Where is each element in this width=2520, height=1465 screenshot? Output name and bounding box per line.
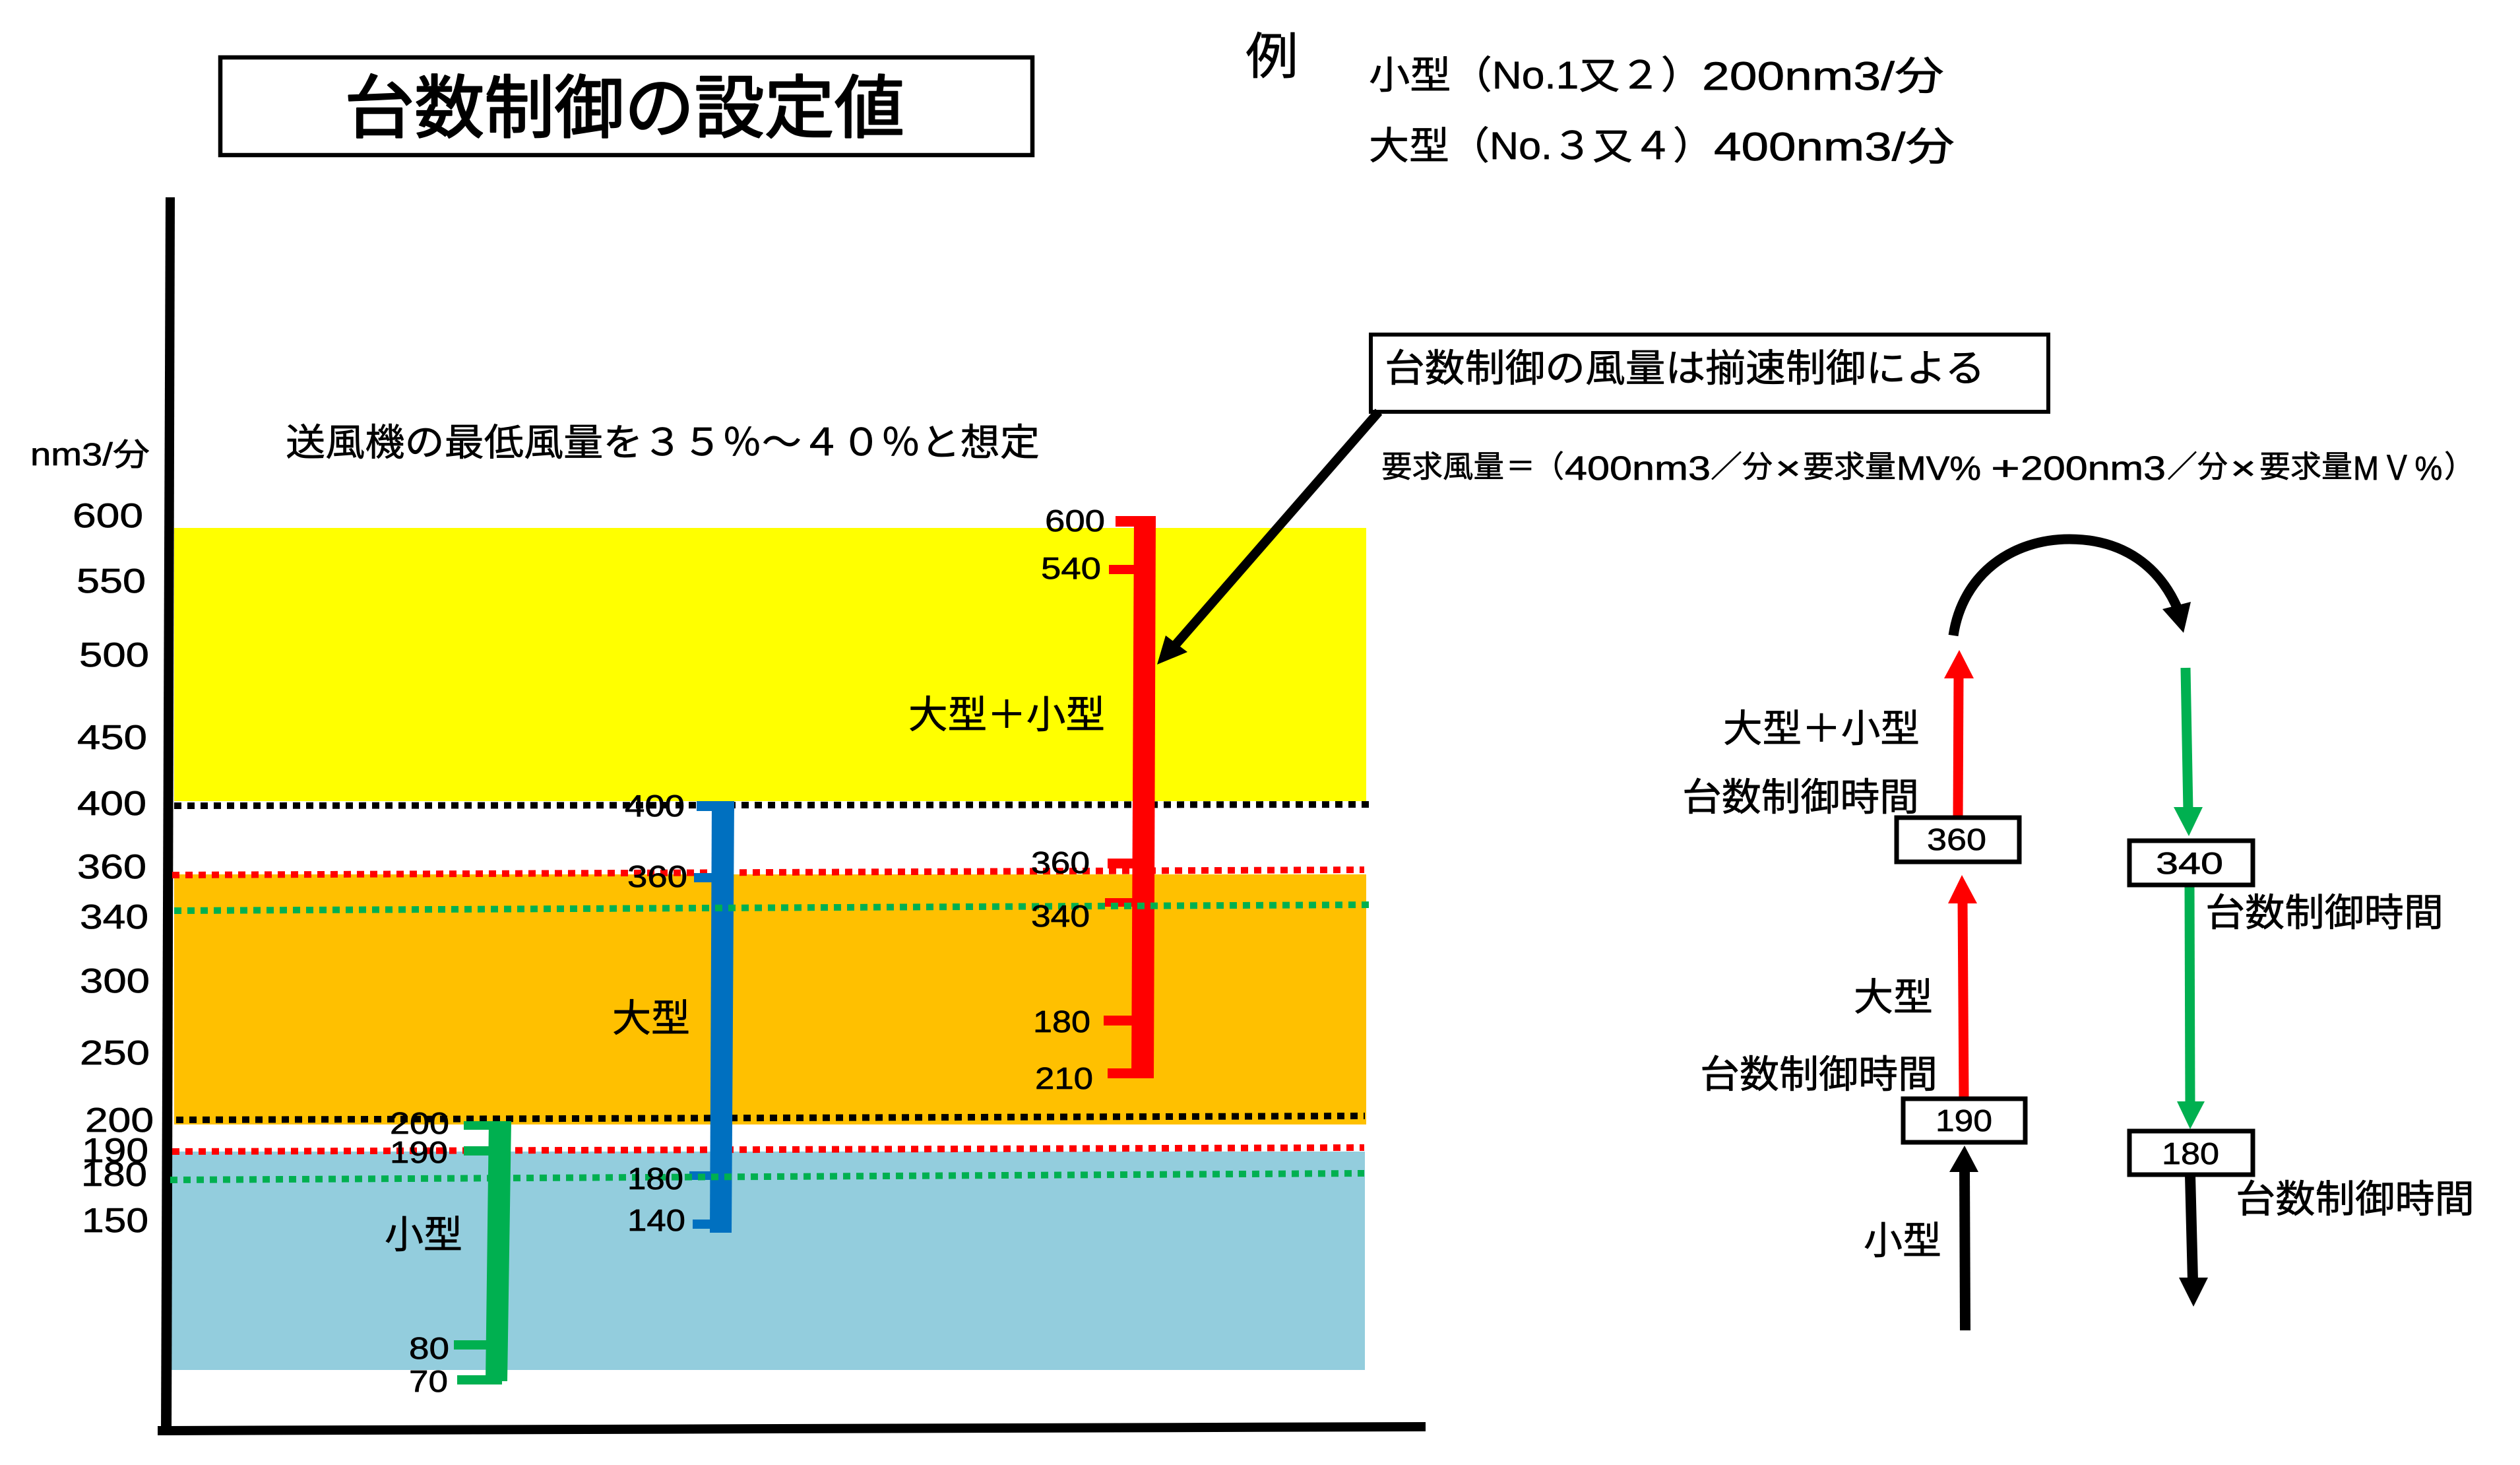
labels: small bracket <box>390 1106 449 1398</box>
dotted line: 190 <box>172 1148 1364 1152</box>
example heading: 例 <box>1245 29 1298 85</box>
formula: ＝ <box>1506 449 1535 484</box>
band: large fan range <box>174 874 1366 1124</box>
labels: large bracket: 360 <box>627 859 687 894</box>
arrow: curved transition <box>1953 539 2191 635</box>
formula: × <box>1775 449 1801 487</box>
chart note: 送風機の最低風量を３５％～４０％と想定 <box>286 422 1040 464</box>
formula: ／ <box>1711 449 1742 484</box>
box: 340 <box>2129 841 2253 885</box>
label: control time upper left: 台数制御時間 <box>1682 776 1919 819</box>
arrow: large fan rising <box>1948 875 1977 1098</box>
formula: 400nm3 <box>1565 449 1711 487</box>
y axis tick labels: 180 <box>81 1156 147 1194</box>
y axis tick labels: 190 <box>82 1132 148 1170</box>
bracket: large range <box>689 801 734 1233</box>
label: large flow: 大型 <box>1854 976 1933 1019</box>
arrow: large plus small rising <box>1944 650 1974 817</box>
formula: 200nm3 <box>2021 449 2166 487</box>
y axis unit: nm3/分 <box>30 438 150 472</box>
labels: small bracket: 70 <box>409 1364 448 1398</box>
labels: large plus small bracket: 600 <box>1045 504 1105 538</box>
labels: large bracket: 140 <box>627 1203 685 1237</box>
formula: ／ <box>2167 449 2197 484</box>
labels: large plus small bracket <box>1031 504 1105 1095</box>
arrow: large plus small falling <box>2174 668 2203 836</box>
y axis tick labels: 250 <box>80 1034 150 1072</box>
dotted line: 200 <box>176 1116 1365 1120</box>
labels: large plus small bracket: 340 <box>1031 899 1090 933</box>
formula: （ <box>1534 449 1564 484</box>
formula <box>1381 449 2474 487</box>
formula: 分 <box>1742 449 1773 484</box>
label: small: 小型 <box>385 1214 462 1256</box>
arrow: callout to red bracket <box>1157 412 1379 665</box>
bracket: small range <box>454 1121 511 1384</box>
dotted line: 400 <box>174 804 1369 806</box>
labels: large plus small bracket: 210 <box>1035 1061 1093 1095</box>
labels: large bracket: 180 <box>627 1161 683 1196</box>
example: small fan capacity: 小型（No.1又２） <box>1369 54 1702 97</box>
example: large fan capacity <box>1369 125 1955 169</box>
labels: large plus small bracket: 360 <box>1031 845 1090 880</box>
box: 180: 180 <box>2162 1136 2219 1171</box>
label: control time lower right: 台数制御時間 <box>2236 1178 2474 1221</box>
formula: MＶ% <box>2353 449 2445 487</box>
y axis tick labels: 340 <box>80 898 148 936</box>
y axis tick labels <box>73 497 154 1240</box>
bracket: large plus small range <box>1104 516 1156 1078</box>
dotted line: 180 <box>170 1173 1364 1180</box>
band: small fan range <box>170 1152 1365 1370</box>
formula: + <box>1991 449 2020 487</box>
y axis <box>161 197 175 1435</box>
arrow: small fan rising <box>1949 1146 1978 1330</box>
box: 180 <box>2129 1131 2253 1175</box>
example: small fan capacity <box>1369 54 1944 98</box>
y axis tick labels: 400 <box>77 785 146 823</box>
y axis tick labels: 150 <box>82 1202 148 1240</box>
example: small fan capacity: 200nm3/分 <box>1702 54 1944 98</box>
callout: 台数制御の風量は揃速制御による <box>1385 347 1985 390</box>
formula: 要求量 <box>2259 449 2352 484</box>
label: control time lower left: 台数制御時間 <box>1700 1053 1937 1096</box>
label: large plus small: 大型＋小型 <box>908 694 1105 736</box>
y axis tick labels: 450 <box>77 719 147 757</box>
dotted line: 360 <box>172 870 1364 875</box>
y axis tick labels: 550 <box>77 562 146 601</box>
label: small flow: 小型 <box>1864 1220 1941 1262</box>
y axis tick labels: 300 <box>80 962 150 1000</box>
dotted line: 340 <box>174 905 1371 911</box>
box: 360: 360 <box>1927 822 1986 857</box>
example: large fan capacity: 400nm3/分 <box>1714 125 1955 169</box>
formula: 分 <box>2197 449 2228 484</box>
labels: large bracket <box>625 789 687 1237</box>
box: 340: 340 <box>2156 846 2223 880</box>
title: 台数制御の設定値 <box>344 71 904 147</box>
labels: large plus small bracket: 540 <box>1041 551 1101 585</box>
y axis tick labels: 500 <box>79 636 149 674</box>
x axis <box>158 1422 1426 1435</box>
label: large: 大型 <box>612 997 690 1040</box>
formula: ） <box>2444 449 2474 484</box>
labels: small bracket: 190 <box>390 1135 448 1169</box>
labels: large plus small bracket: 180 <box>1033 1004 1090 1039</box>
box: 360 <box>1897 818 2019 862</box>
y axis tick labels: 360 <box>77 848 146 886</box>
labels: small bracket: 200 <box>390 1106 449 1140</box>
label: control time upper right: 台数制御時間 <box>2205 892 2443 934</box>
formula: 要求風量 <box>1381 449 1504 484</box>
band: large plus small range <box>174 528 1366 801</box>
label: large plus small flow: 大型＋小型 <box>1723 707 1920 750</box>
arrow: small fan falling <box>2179 1175 2208 1307</box>
box: 190: 190 <box>1936 1103 1992 1138</box>
formula: MV% <box>1897 449 1981 487</box>
title <box>220 57 1032 155</box>
y axis tick labels: 600 <box>73 497 143 535</box>
box: 190 <box>1903 1099 2025 1142</box>
arrow: large fan falling <box>2177 886 2205 1129</box>
labels: small bracket: 80 <box>409 1331 449 1365</box>
formula: 要求量 <box>1803 449 1896 484</box>
callout <box>1371 335 2048 412</box>
formula: × <box>2230 449 2256 487</box>
y axis tick labels: 200 <box>85 1101 154 1140</box>
labels: large bracket: 400 <box>625 789 685 823</box>
example: large fan capacity: 大型（No.３又４） <box>1369 125 1713 168</box>
